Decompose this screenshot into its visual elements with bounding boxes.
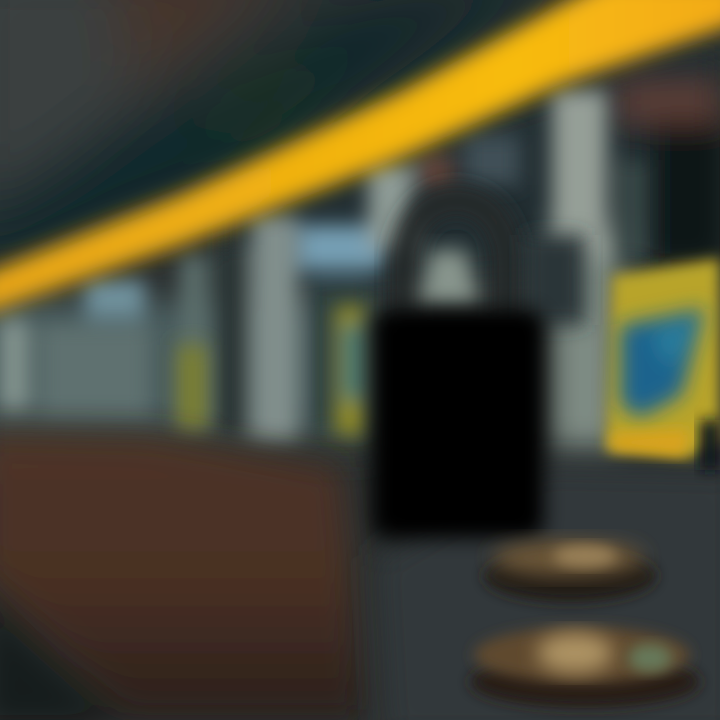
upper coin [484, 540, 656, 602]
upper right dark zone [230, 40, 720, 300]
station pillars [0, 90, 645, 440]
ceiling: dark upper left [0, 0, 560, 280]
padlock body [372, 310, 544, 538]
padlock [372, 200, 585, 538]
small yellow and green signs [178, 305, 366, 435]
floor right [375, 465, 720, 720]
lower coin [470, 627, 700, 708]
yellow and blue sign [606, 258, 720, 470]
table surface [0, 432, 365, 720]
station mid band [0, 230, 620, 455]
shackle side shadow [525, 235, 585, 325]
shackle opening highlight [418, 250, 480, 305]
padlock shackle [405, 200, 507, 320]
yellow diagonal band [0, 0, 720, 315]
sign corner shadow [700, 420, 720, 470]
